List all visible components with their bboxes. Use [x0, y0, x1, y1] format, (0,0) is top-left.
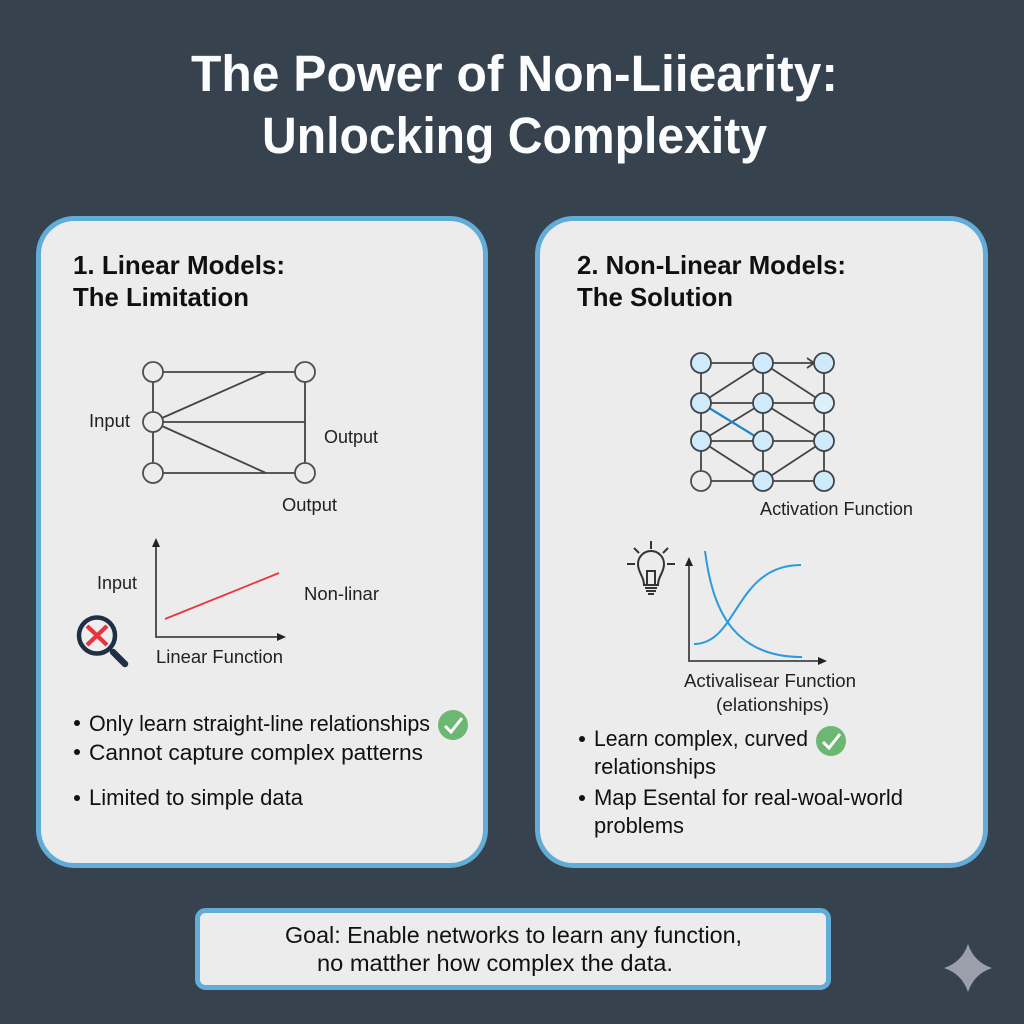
heading: non-linear models: [577, 250, 846, 312]
callout: goal: no matther how complex the data.: [317, 950, 673, 976]
title: The Power of Non-Liiearity:: [191, 45, 838, 102]
heading: linear models: 1. Linear Models:: [73, 250, 285, 280]
callout: goal: [198, 910, 828, 988]
icon: magnifier with red cross: [79, 618, 125, 664]
bullet list: solutions: problems: [594, 813, 684, 838]
linear network diagram: Output: [282, 494, 337, 515]
linear network diagram: Output: [324, 426, 378, 447]
panel: linear models: [38, 218, 486, 866]
icon: light bulb: [627, 541, 675, 594]
bullet list: limitations: Only learn straight-line relationships: [89, 711, 430, 736]
linear network diagram: Input: [89, 410, 130, 431]
linear function chart: Input: [97, 572, 137, 593]
activation function chart: Activalisear Function: [684, 670, 856, 691]
bullet list: solutions: Learn complex, curved: [594, 726, 808, 751]
bullet list: limitations: [74, 711, 430, 810]
linear network diagram: [89, 362, 378, 515]
linear function chart: Non-linar: [304, 583, 379, 604]
title: Unlocking Complexity: [262, 107, 768, 164]
bullet list: solutions: [579, 726, 903, 838]
non-linear network diagram: [691, 353, 913, 519]
heading: linear models: [73, 250, 285, 312]
bullet list: solutions: Map Esental for real-woal-world: [594, 785, 903, 810]
callout: goal: Goal: Enable networks to learn any function,: [285, 922, 742, 948]
panel: non-linear models: [538, 218, 986, 866]
linear function chart: [97, 538, 379, 667]
bullet list: limitations: Cannot capture complex patterns: [89, 740, 423, 765]
activation function chart: (elationships): [716, 694, 829, 715]
heading: linear models: The Limitation: [73, 282, 249, 312]
activation function chart: [684, 551, 856, 715]
non-linear network diagram: Activation Function: [760, 498, 913, 519]
bullet list: limitations: Limited to simple data: [89, 785, 304, 810]
icon: green check: [816, 726, 846, 756]
bullet list: solutions: relationships: [594, 754, 716, 779]
icon: green check: [438, 710, 468, 740]
linear function chart: Linear Function: [156, 646, 283, 667]
heading: non-linear models: The Solution: [577, 282, 733, 312]
heading: non-linear models: 2. Non-Linear Models:: [577, 250, 846, 280]
icon: sparkle: [944, 944, 992, 992]
title: [191, 45, 838, 164]
